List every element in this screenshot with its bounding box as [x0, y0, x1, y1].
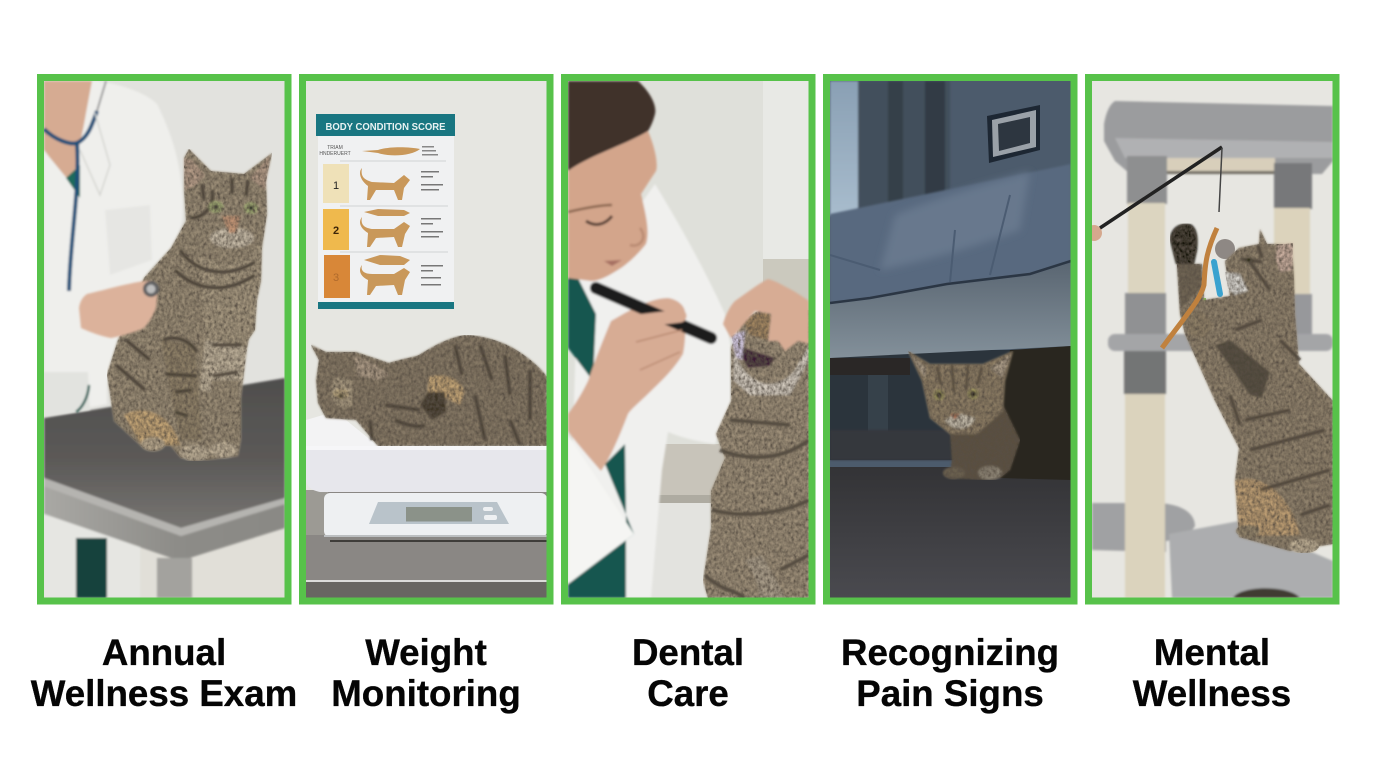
caption: recognizing pain signs: Pain Signs: [856, 673, 1044, 714]
cat tree: [1092, 101, 1333, 598]
caption: annual wellness exam: Wellness Exam: [31, 673, 297, 714]
digital scale on table: [306, 446, 547, 598]
stainless table: [44, 378, 285, 598]
caption: weight monitoring: Weight: [365, 632, 487, 673]
green frames: [40, 78, 1336, 601]
framed picture: [987, 105, 1040, 163]
panel: weight monitoring: [306, 81, 547, 598]
curtains: [830, 81, 950, 216]
body condition score poster: TRIAM: [327, 145, 343, 151]
caption: dental care: Care: [647, 673, 729, 714]
under-bed shadow and floor: [830, 350, 1071, 598]
body condition score poster: [316, 114, 455, 309]
body condition score poster: 3: [333, 272, 339, 284]
body condition score poster: HNDERUERT: [319, 151, 351, 157]
panel: mental wellness: [1086, 81, 1333, 598]
caption: weight monitoring: Monitoring: [331, 673, 521, 714]
bed with blanket: [830, 164, 1071, 358]
vet hand holding cat: [723, 279, 809, 351]
tabby cat: [107, 149, 272, 461]
white towel: [306, 415, 378, 446]
crouching cat: [311, 335, 547, 446]
vet with penlight: [568, 81, 731, 598]
vet in white coat: [44, 81, 183, 416]
panel: annual wellness exam: [44, 81, 285, 598]
caption: mental wellness: Wellness: [1133, 673, 1291, 714]
playing cat: [1170, 224, 1333, 553]
panel: recognizing pain signs: [830, 81, 1071, 598]
hiding cat: [908, 346, 1071, 480]
vet hand with stethoscope: [79, 281, 159, 338]
toy feather: [1162, 228, 1217, 348]
infographic canvas: [30, 74, 1340, 714]
caption: annual wellness exam: Annual: [102, 632, 226, 673]
body condition score poster: 2: [333, 225, 339, 237]
panel: dental care: [568, 81, 809, 598]
cat having teeth checked: [703, 305, 809, 598]
wand toy: [1092, 146, 1235, 301]
body condition score poster: 1: [333, 180, 339, 192]
caption: dental care: Dental: [632, 632, 744, 673]
caption: recognizing pain signs: Recognizing: [841, 632, 1059, 673]
caption: mental wellness: Mental: [1154, 632, 1270, 673]
body condition score poster: BODY CONDITION SCORE: [326, 122, 446, 133]
